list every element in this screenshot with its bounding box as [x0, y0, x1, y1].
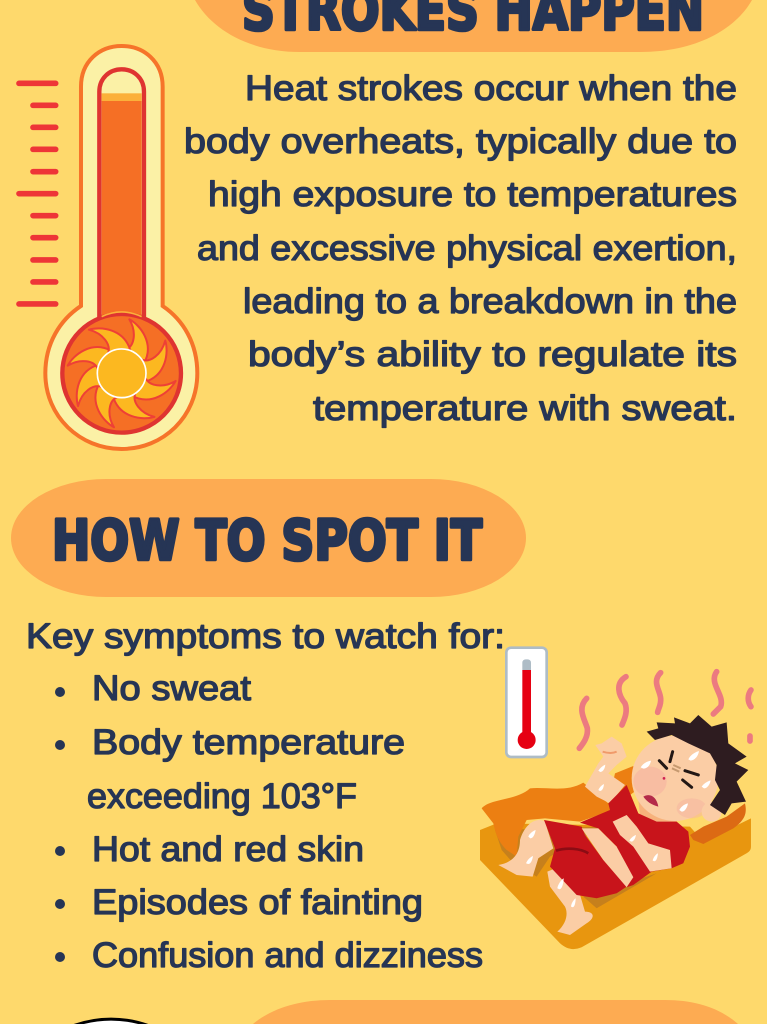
symptoms list: Episodes of fainting: [92, 883, 423, 922]
text block: what heat strokes are: [184, 69, 737, 428]
pillow: [690, 803, 746, 844]
symptoms list: No sweat: [92, 669, 251, 708]
icon: circular badge, cut off at bottom: [70, 1019, 152, 1024]
text block: what heat strokes are: body’s ability to regulate its: [248, 335, 737, 374]
text block: what heat strokes are: and excessive physical exertion,: [197, 229, 737, 268]
red shorts: [544, 820, 627, 898]
blanket shadow: [495, 827, 603, 877]
sweat drops: [526, 751, 711, 907]
heading pill: how to spot it: [11, 479, 526, 597]
icon: small thermometer card: [506, 648, 547, 757]
legs: [498, 820, 553, 877]
head: [632, 736, 718, 821]
text block: what heat strokes are: leading to a breakdown in the: [243, 282, 737, 321]
arm raised: [585, 737, 627, 803]
neck: [638, 800, 677, 823]
arm on chest: [613, 815, 672, 872]
illustration: overheated child lying on mat: [480, 672, 751, 949]
red shirt: [580, 785, 690, 887]
text block: what heat strokes are: Heat strokes occur when the: [245, 69, 737, 108]
text block: what heat strokes are: body overheats, typically due to: [184, 122, 737, 161]
heat waves: [579, 672, 751, 748]
symptoms list: Body temperature: [92, 723, 405, 762]
icon: thermometer with sun: [19, 46, 197, 449]
text block: what heat strokes are: temperature with sweat.: [313, 389, 737, 428]
symptoms list: Confusion and dizziness: [92, 936, 483, 975]
hair: [647, 715, 748, 815]
text block: what heat strokes are: high exposure to temperatures: [208, 175, 737, 214]
heading pill: how to spot it: HOW TO SPOT IT: [52, 508, 482, 572]
symptoms list: Hot and red skin: [92, 830, 364, 869]
symptoms list: exceeding 103°F: [87, 777, 357, 816]
heading pill: next section, cut off at bottom: [253, 1000, 738, 1024]
text: key symptoms intro: Key symptoms to watch for:: [26, 617, 505, 656]
symptoms list: [55, 669, 483, 975]
blanket: [482, 766, 637, 857]
belly: [582, 828, 633, 887]
mat: [480, 818, 751, 949]
face details: [659, 752, 698, 787]
